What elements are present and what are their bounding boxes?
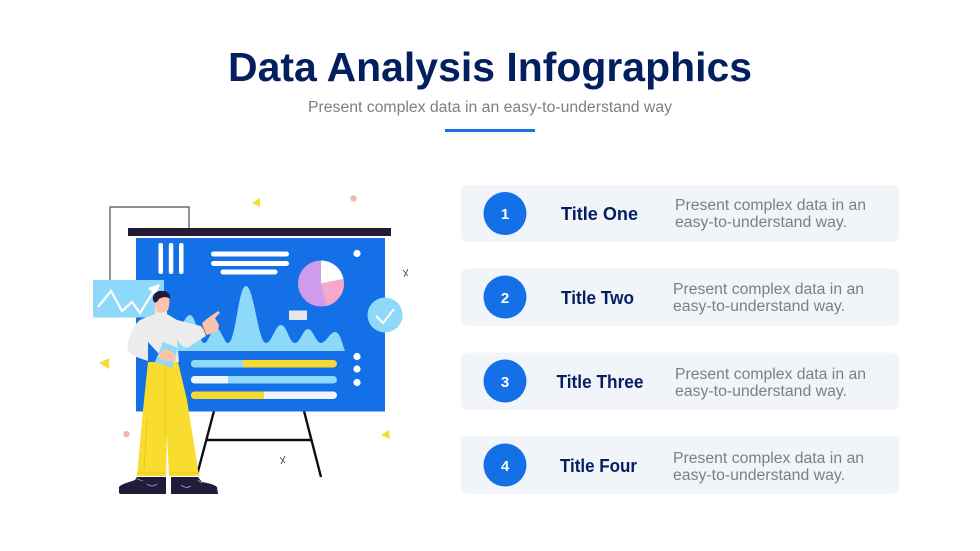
person (119, 291, 220, 494)
card title 2: Title Two (561, 288, 634, 308)
card 4 (461, 436, 899, 494)
progress bar one (191, 360, 337, 368)
hanging frame outline (110, 207, 189, 281)
number badge 2 (484, 276, 526, 318)
sweater (127, 314, 206, 362)
light blue clipboard (155, 342, 178, 368)
number badge 2: 2 (501, 290, 509, 307)
trousers (137, 362, 199, 476)
easel legs (197, 411, 321, 477)
pie chart (298, 260, 344, 306)
card title 4: Title Four (560, 456, 637, 476)
card 2 (461, 268, 899, 326)
number badge 1: 1 (501, 206, 509, 223)
card text 1: easy-to-understand way. (675, 214, 847, 231)
card text 4: easy-to-understand way. (673, 467, 845, 484)
progress bar three (191, 392, 337, 399)
decorative crosses (280, 269, 408, 464)
number badge 4: 4 (501, 458, 510, 475)
blue board (136, 238, 385, 412)
check badge (368, 298, 402, 332)
number badge 4 (484, 444, 526, 486)
number badge 3: 3 (501, 374, 509, 391)
card text 3: easy-to-understand way. (675, 383, 847, 400)
board top bar (128, 228, 391, 236)
board dots column (353, 353, 361, 386)
area chart (176, 286, 345, 351)
neck (155, 305, 167, 316)
face (155, 296, 169, 313)
number badge 1 (484, 192, 526, 235)
card text 2: easy-to-understand way. (673, 298, 845, 315)
cuff line (202, 324, 206, 335)
card text 1: Present complex data in an (675, 197, 866, 214)
board vertical bars (158, 243, 184, 274)
progress bar two (191, 376, 337, 384)
small grey label (289, 310, 307, 320)
card title 3: Title Three (556, 372, 644, 392)
card title 1: Title One (561, 204, 638, 224)
pointing hand (202, 311, 220, 335)
board text lines (211, 252, 289, 274)
card text 3: Present complex data in an (675, 366, 866, 383)
card text 4: Present complex data in an (673, 450, 864, 467)
decorative dots (123, 195, 357, 437)
subtitle: Present complex data in an easy-to-understand way (308, 99, 672, 116)
title: Data Analysis Infographics (228, 44, 752, 90)
decorative triangles (99, 198, 390, 439)
illustration: presenter at data board (93, 195, 408, 494)
number badge 3 (484, 360, 526, 402)
card 3 (461, 352, 899, 410)
hand on hip (157, 348, 176, 361)
card text 2: Present complex data in an (673, 281, 864, 298)
trend card (93, 280, 164, 318)
card 1 (461, 185, 899, 242)
board dot top (353, 250, 361, 257)
hair (153, 291, 170, 303)
shoes (119, 477, 218, 494)
title underline (445, 129, 535, 132)
gap between arm and torso (148, 342, 160, 362)
